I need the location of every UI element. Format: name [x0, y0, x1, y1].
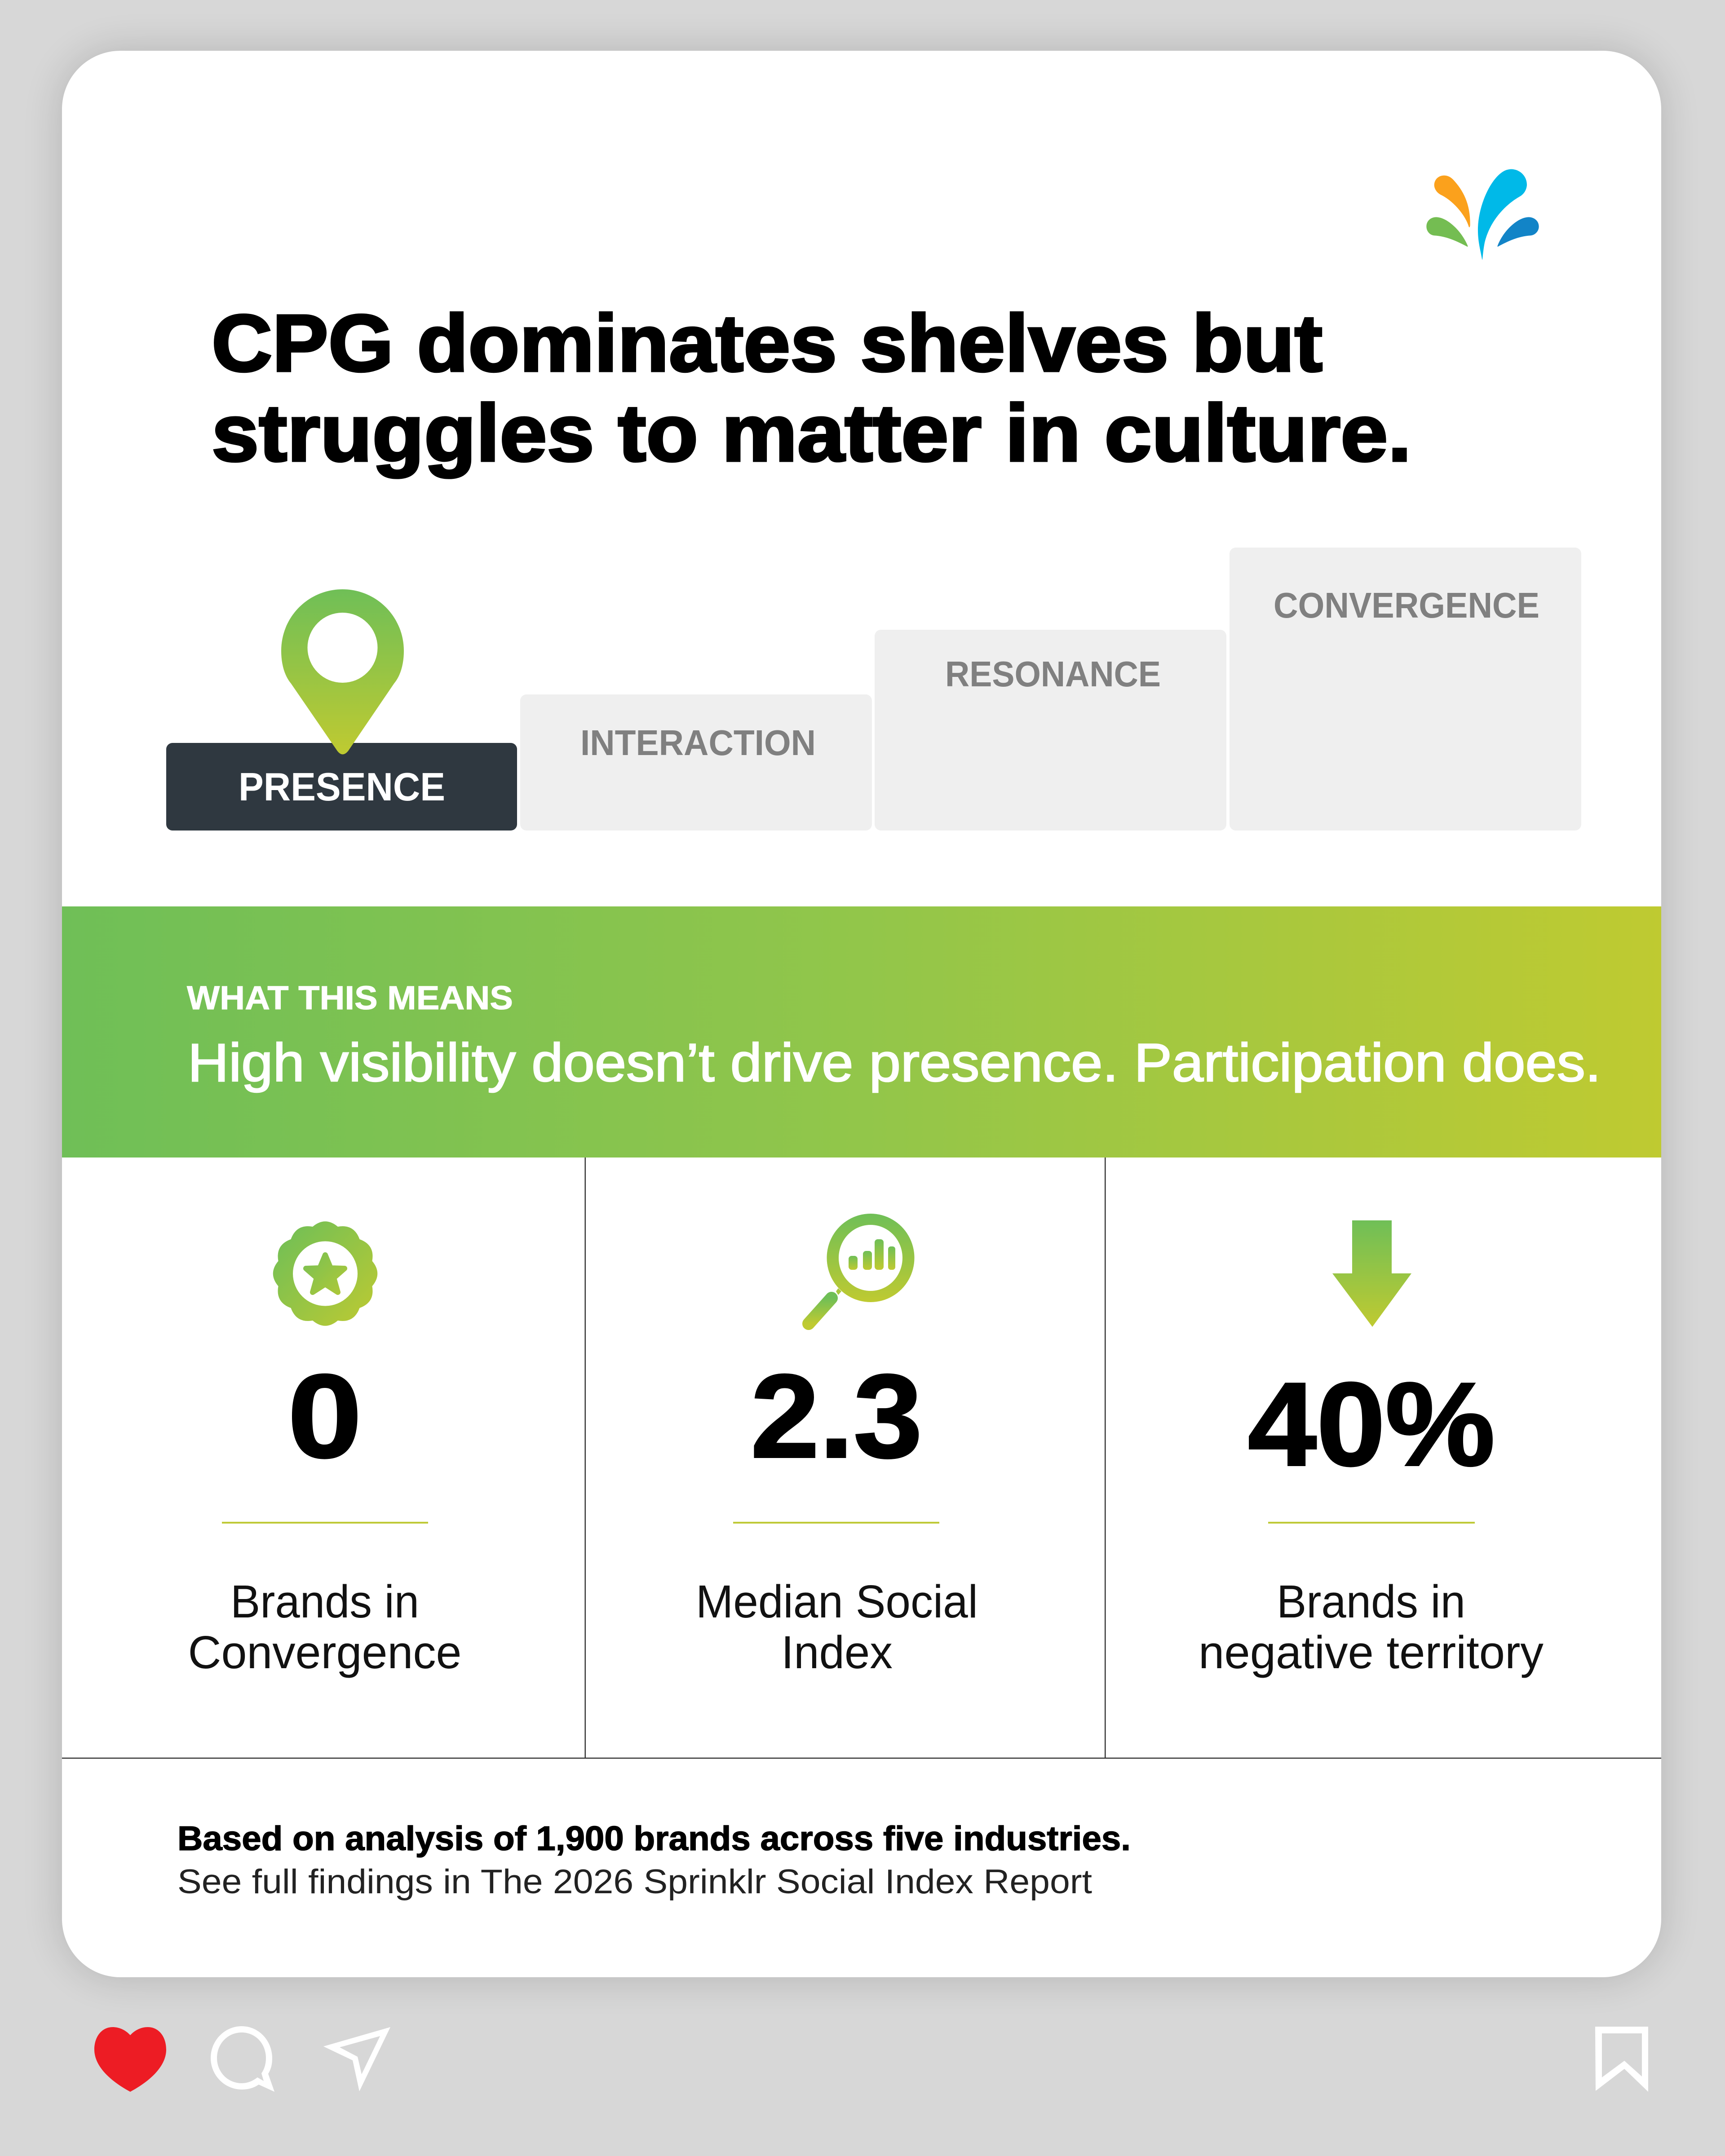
banner: what this means [62, 906, 1661, 1158]
stage: convergence [1230, 548, 1581, 831]
label: brands in convergence: Brands in [230, 1576, 419, 1627]
stage: resonance [875, 630, 1226, 831]
icon: Sprinklr logo [1426, 169, 1539, 260]
banner: what this means: High visibility doesn’t drive presence. Participation does. [188, 1033, 1601, 1093]
stat: brands in convergence [188, 1221, 462, 1678]
number: 2.3: 2.3 [751, 1350, 922, 1482]
footer note [177, 1820, 1131, 1901]
icon: magnifier with bars [809, 1214, 915, 1324]
title: struggles to matter in culture. [212, 388, 1411, 478]
label: brands in negative territory [1199, 1576, 1544, 1678]
stage: convergence: CONVERGENCE [1274, 585, 1539, 625]
label: brands in negative territory: negative territory [1199, 1626, 1544, 1678]
stage: presence [166, 743, 517, 831]
icon: bookmark [1595, 2027, 1648, 2092]
social action icons [94, 2026, 1648, 2092]
label: median social index [696, 1576, 978, 1678]
footer note: See full findings in The 2026 Sprinklr Social Index Report [177, 1863, 1092, 1901]
label: brands in convergence [188, 1576, 462, 1678]
number: 40%: 40% [1248, 1358, 1495, 1490]
icon: badge with star [273, 1221, 377, 1326]
divider: 40% [1268, 1522, 1475, 1524]
icon: location pin [281, 589, 404, 755]
stage: resonance: RESONANCE [945, 654, 1161, 694]
stage: interaction [520, 694, 872, 831]
stat: brands in negative territory [1199, 1220, 1544, 1678]
icon: comment bubble [211, 2026, 274, 2092]
stage: presence: PRESENCE [239, 764, 445, 809]
stat: median social index [696, 1214, 978, 1678]
title: CPG dominates shelves but [212, 298, 1322, 389]
icon: down arrow [1332, 1220, 1411, 1327]
title [212, 298, 1411, 478]
divider: 0 [222, 1522, 428, 1524]
label: median social index: Index [781, 1626, 893, 1678]
label: brands in negative territory: Brands in [1277, 1576, 1465, 1627]
label: median social index: Median Social [696, 1576, 978, 1627]
footer note: Based on analysis of 1,900 brands across five industries. [177, 1820, 1131, 1858]
stage: interaction: INTERACTION [580, 723, 816, 763]
icon: send arrow [323, 2027, 390, 2091]
icon: heart [94, 2027, 166, 2092]
staircase chart: maturity stages [166, 548, 1581, 831]
number: 0: 0 [288, 1350, 362, 1482]
banner: what this means: WHAT THIS MEANS [187, 979, 513, 1016]
label: brands in convergence: Convergence [188, 1626, 462, 1678]
divider: 2.3 [733, 1522, 939, 1524]
